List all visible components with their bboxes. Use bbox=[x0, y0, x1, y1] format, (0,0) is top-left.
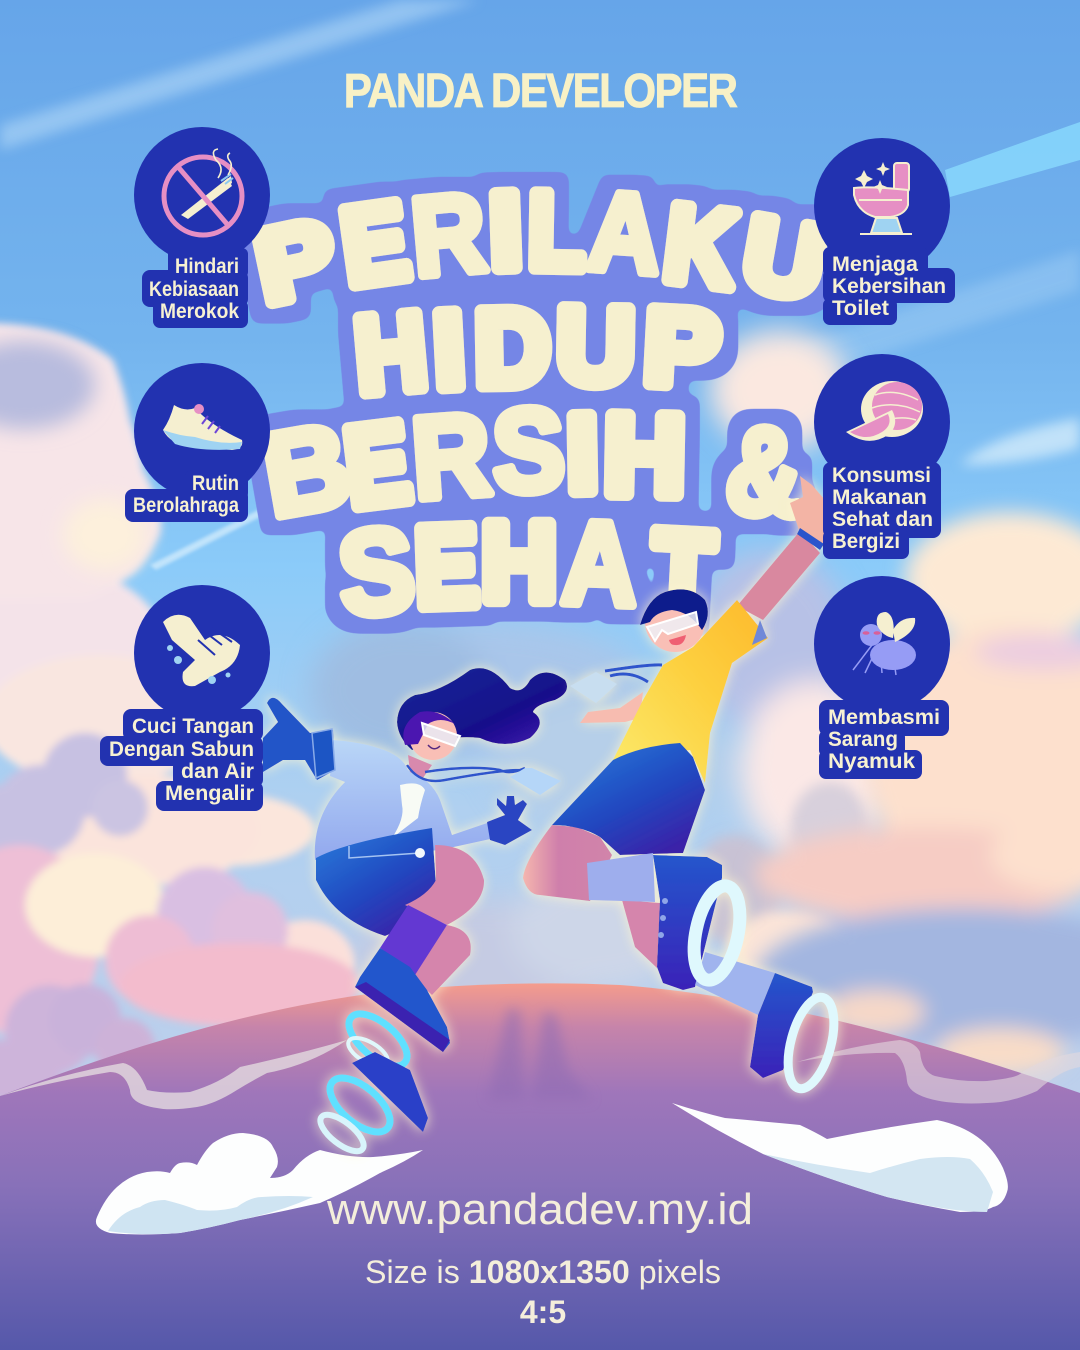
label: Menjaga Kebersihan Toilet: Kebersihan bbox=[832, 275, 946, 298]
label: Konsumsi Makanan Sehat dan Bergizi: Bergizi bbox=[832, 530, 900, 553]
label: Menjaga Kebersihan Toilet bbox=[832, 253, 946, 320]
title line: Perilaku: L bbox=[527, 171, 586, 292]
man id card bbox=[570, 672, 617, 703]
man bracelet bbox=[797, 528, 824, 550]
main title bbox=[246, 169, 833, 642]
title line: Sehat: A bbox=[560, 496, 639, 631]
woman left glove bbox=[263, 698, 335, 780]
badge: mosquito bbox=[814, 576, 950, 779]
woman fringe bbox=[403, 711, 455, 745]
title line: Hidup: U bbox=[556, 284, 636, 407]
shoe studs bbox=[658, 898, 668, 938]
label: Membasmi Sarang Nyamuk: Membasmi bbox=[828, 706, 940, 729]
man left arm bbox=[580, 692, 643, 723]
badge: no smoking bbox=[134, 127, 270, 328]
man sock bbox=[587, 853, 655, 902]
hand shadow on hill bbox=[488, 1008, 592, 1100]
bottom cloud left bbox=[96, 1133, 423, 1234]
woman hair bbox=[397, 668, 567, 750]
icon: mosquito bbox=[853, 612, 916, 675]
title line: Sehat bbox=[333, 496, 717, 642]
left lower mass bbox=[0, 565, 170, 755]
woman face bbox=[409, 712, 457, 760]
label: Cuci Tangan Dengan Sabun dan Air Mengalir: Mengalir bbox=[165, 782, 254, 805]
label: Cuci Tangan Dengan Sabun dan Air Mengalir bbox=[109, 715, 254, 805]
woman thigh bbox=[405, 845, 484, 925]
woman ring bottom bbox=[315, 1108, 369, 1158]
title line: Sehat: H bbox=[481, 500, 557, 624]
light blue streak right bbox=[945, 122, 1080, 197]
woman right glove bbox=[487, 796, 532, 845]
size caption: Size is 1080x1350 pixels bbox=[365, 1254, 721, 1290]
label: Cuci Tangan Dengan Sabun dan Air Mengalir: Dengan Sabun bbox=[109, 738, 254, 761]
man shoe 2 bbox=[750, 973, 813, 1078]
title line: Perilaku: A bbox=[584, 169, 665, 298]
woman id card bbox=[510, 768, 561, 795]
ribbon right bbox=[797, 1040, 1080, 1103]
label: Hindari Kebiasaan Merokok: Kebiasaan bbox=[149, 278, 239, 301]
man thigh bbox=[523, 825, 612, 901]
woman sock bbox=[380, 905, 447, 975]
man ring lower bbox=[780, 992, 842, 1094]
label: Menjaga Kebersihan Toilet: Menjaga bbox=[832, 253, 918, 276]
header title: PANDA DEVELOPER bbox=[344, 63, 737, 118]
label: Membasmi Sarang Nyamuk: Sarang bbox=[828, 728, 898, 751]
label: Cuci Tangan Dengan Sabun dan Air Mengalir: dan Air bbox=[181, 760, 254, 783]
man face bbox=[645, 592, 705, 652]
badge: toilet bbox=[814, 138, 955, 325]
wispy cloud right bbox=[960, 418, 1080, 465]
label: Membasmi Sarang Nyamuk bbox=[828, 706, 940, 773]
man ring upper bbox=[686, 882, 748, 984]
clouds right bbox=[755, 512, 1080, 1076]
man mouth bbox=[669, 635, 686, 645]
title line: Hidup: I bbox=[431, 289, 468, 412]
woman shoe lower bbox=[352, 1052, 428, 1132]
label: Rutin Berolahraga: Rutin bbox=[192, 472, 239, 495]
ribbon left bbox=[0, 1040, 347, 1109]
title line: Bersih &: S bbox=[490, 383, 567, 517]
left pink base bbox=[0, 845, 100, 1035]
man goggles bbox=[647, 612, 698, 641]
title line: Perilaku: K bbox=[658, 182, 743, 310]
title line: Bersih &: H bbox=[603, 391, 686, 519]
title line: Perilaku: U bbox=[735, 193, 833, 322]
man shoe bbox=[653, 855, 722, 990]
woman glove cuff bbox=[312, 729, 335, 778]
website url: www.pandadev.my.id bbox=[326, 1185, 753, 1234]
clouds left bbox=[0, 323, 360, 1100]
label: Rutin Berolahraga: Berolahraga bbox=[133, 494, 239, 517]
man hair bbox=[640, 589, 708, 630]
label: Konsumsi Makanan Sehat dan Bergizi: Makanan bbox=[832, 486, 927, 509]
title line: Perilaku: P bbox=[246, 198, 346, 326]
title line: Perilaku: I bbox=[488, 170, 524, 292]
left upper dome bbox=[0, 323, 161, 600]
label: Konsumsi Makanan Sehat dan Bergizi: Sehat dan bbox=[832, 508, 933, 531]
man shirt bbox=[613, 600, 768, 783]
left dome shading bbox=[0, 341, 147, 571]
label: Hindari Kebiasaan Merokok bbox=[149, 255, 239, 323]
label: Konsumsi Makanan Sehat dan Bergizi bbox=[832, 464, 933, 553]
sky streaks bbox=[0, 0, 1080, 380]
title line: Bersih &: E bbox=[338, 398, 416, 530]
man leg 2 bbox=[695, 952, 775, 1015]
woman ring middle bbox=[321, 1068, 399, 1142]
clouds back centre bbox=[310, 330, 890, 1020]
title line: Bersih &: B bbox=[254, 398, 360, 543]
icon: running shoe bbox=[163, 404, 242, 450]
ratio caption: 4:5 bbox=[520, 1294, 566, 1330]
title line: Hidup: P bbox=[641, 286, 723, 410]
man sleeve shade bbox=[752, 620, 767, 645]
icon: melon bbox=[846, 381, 923, 441]
woman lanyard bbox=[407, 765, 525, 781]
label: Konsumsi Makanan Sehat dan Bergizi: Konsumsi bbox=[832, 464, 931, 487]
title line: Bersih &: R bbox=[408, 389, 495, 524]
man lanyard bbox=[605, 665, 662, 682]
badge: exercise bbox=[125, 363, 270, 522]
label: Cuci Tangan Dengan Sabun dan Air Mengalir: Cuci Tangan bbox=[132, 715, 254, 738]
title line: Sehat: T bbox=[649, 507, 717, 641]
woman torso bbox=[315, 740, 495, 860]
label: Membasmi Sarang Nyamuk: Nyamuk bbox=[828, 750, 915, 773]
title line: Hidup: D bbox=[474, 288, 551, 409]
man raised hand bbox=[790, 476, 825, 548]
hill bbox=[0, 983, 1080, 1350]
title line: Perilaku: R bbox=[406, 169, 491, 300]
icon: no smoking bbox=[164, 149, 242, 235]
title line: Bersih &: I bbox=[566, 393, 599, 515]
woman ring top bbox=[340, 1004, 416, 1076]
thin streak left bbox=[150, 508, 266, 570]
title line: Hidup bbox=[350, 284, 723, 416]
icon: toilet bbox=[854, 162, 912, 234]
character: woman bbox=[263, 668, 567, 1158]
woman shoe upper bbox=[355, 948, 450, 1052]
lavender lumps bbox=[43, 733, 127, 817]
woman neck bbox=[408, 755, 432, 778]
woman shoe sole bbox=[355, 982, 450, 1052]
title line: Perilaku bbox=[246, 169, 833, 326]
woman lower leg bbox=[410, 925, 471, 995]
label: Hindari Kebiasaan Merokok: Hindari bbox=[175, 255, 239, 278]
shorts pocket bbox=[349, 846, 420, 858]
badge: wash hands bbox=[100, 585, 270, 811]
woman ring inner bbox=[344, 1032, 392, 1072]
woman shorts bbox=[316, 828, 436, 936]
woman shirt highlight bbox=[392, 783, 425, 838]
title line: Sehat: E bbox=[413, 502, 480, 630]
badge: healthy food bbox=[814, 354, 950, 559]
man shorts bbox=[552, 743, 705, 855]
label: Hindari Kebiasaan Merokok: Merokok bbox=[160, 300, 239, 323]
label: Rutin Berolahraga bbox=[133, 472, 239, 517]
title line: Bersih & bbox=[254, 383, 806, 543]
title line: Hidup: H bbox=[350, 290, 431, 416]
woman goggles bbox=[422, 723, 460, 746]
bottom cloud right bbox=[672, 1103, 1008, 1212]
icon: washing hands bbox=[163, 615, 240, 686]
title line: Sehat: S bbox=[333, 501, 420, 642]
label: Menjaga Kebersihan Toilet: Toilet bbox=[832, 297, 889, 320]
woman smile bbox=[428, 745, 440, 749]
man lower leg bbox=[622, 900, 660, 968]
man raised arm bbox=[737, 531, 820, 620]
character: man bbox=[523, 476, 842, 1094]
title line: Perilaku: E bbox=[334, 179, 415, 309]
title line: Bersih &: & bbox=[723, 401, 806, 543]
